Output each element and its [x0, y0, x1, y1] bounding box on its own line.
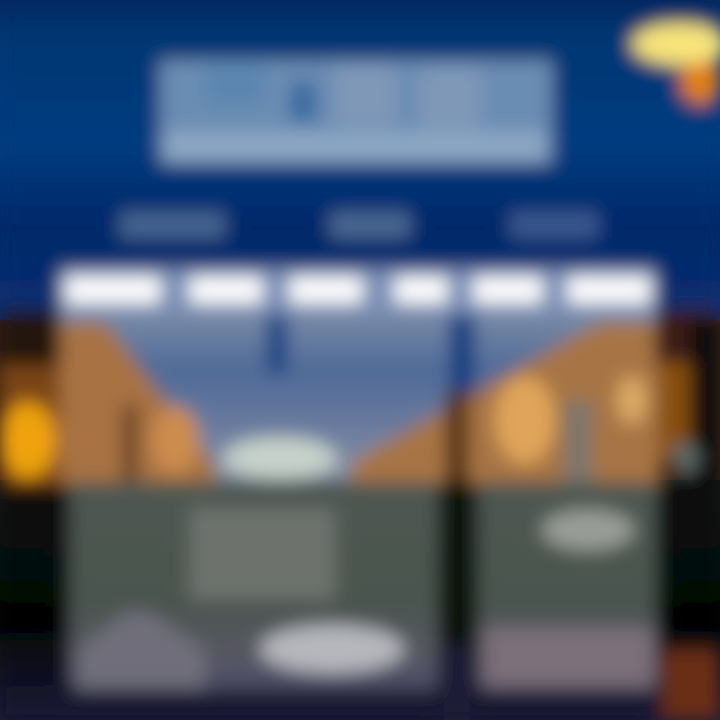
subheadings row	[120, 212, 598, 238]
callout: white glow at horizon	[224, 437, 336, 479]
background: deep blue sky header	[0, 0, 720, 320]
panel: lower right card	[478, 482, 656, 694]
subheading one	[120, 212, 225, 238]
panel: lower left card	[70, 482, 438, 694]
callout: right card upper highlight	[542, 510, 634, 550]
icon: lower left graphic	[78, 612, 205, 688]
button five	[474, 277, 542, 303]
column: centre right dark blue and brown	[445, 312, 475, 484]
navigation band behind buttons	[60, 268, 656, 314]
column: centre left dark blue	[266, 312, 288, 374]
button three	[290, 277, 362, 303]
corner: warm reddish-brown glow	[662, 650, 720, 720]
title	[160, 60, 552, 164]
building: left wing	[0, 310, 215, 485]
subheading two	[330, 212, 410, 238]
callout: lower centre highlight	[260, 625, 404, 673]
button one	[66, 277, 160, 303]
subheading three	[510, 212, 598, 238]
icon: glowing lamp at top right	[632, 23, 720, 104]
text block: right card lower tint	[484, 628, 654, 686]
button row	[66, 277, 650, 303]
text block: central summary	[190, 508, 335, 600]
dark divider between lower cards	[444, 480, 470, 650]
button two	[190, 277, 262, 303]
background: dark lower band	[0, 480, 720, 720]
background: dusk sky band	[60, 312, 660, 480]
divider foot in lower band	[444, 645, 470, 720]
button four	[395, 277, 447, 303]
button six	[568, 277, 650, 303]
building: right wing	[350, 310, 720, 490]
